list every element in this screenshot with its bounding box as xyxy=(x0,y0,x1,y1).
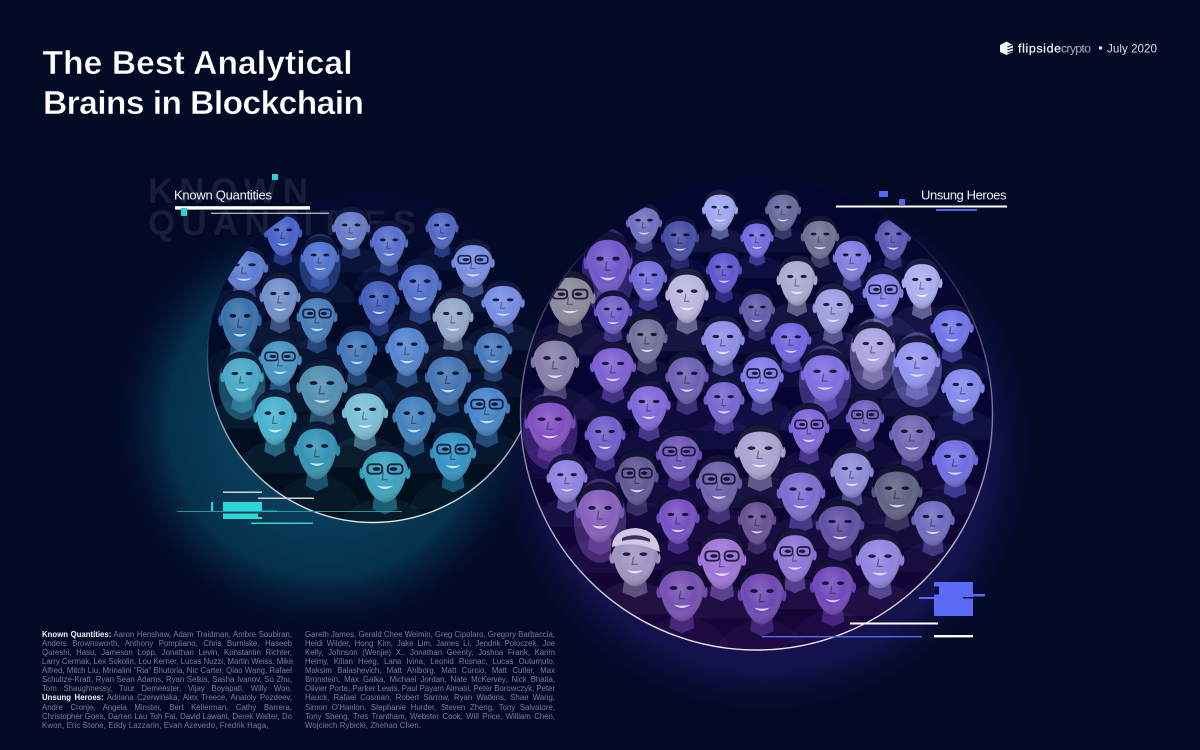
portraits: Known Quantities xyxy=(199,206,543,532)
text block: names column 1: Qureshi, Hasu, Jameson Lopp, Jonathan Levin, Konstantin Richter, xyxy=(42,648,292,657)
circle backdrop and outline xyxy=(520,178,992,650)
logo: flipside crypto with date: crypto xyxy=(1061,41,1091,55)
text block: names column 1: Anders Brownsworth, Anthony Pompliano, Chris Burniske, Haseeb xyxy=(42,639,292,648)
cap on portrait xyxy=(612,528,660,552)
text block: names column 1: Andre Cronje, Angela Minster, Bert Kellerman, Cathy Barrera, xyxy=(42,702,292,712)
text block: names column 1: Kwon, Eric Stone, Eddy Lazzarin, Evan Azevedo, Fredrik Haga, xyxy=(42,721,268,730)
title xyxy=(42,45,364,122)
label: Known Quantities: Known Quantities xyxy=(174,188,272,202)
ghost heading: Known Quantities: KNOWN xyxy=(148,172,308,211)
decoration: teal glitch bars xyxy=(177,492,402,524)
panel: Unsung Heroes circle xyxy=(502,178,1003,654)
text block: names column 1: Unsung Heroes: Adriana Czerwińska, Alex Treece, Anatoly Pozdeev, xyxy=(42,693,292,702)
text block: names column 2: Olivier Porte, Parker Lewis, Paul Payam Almasi, Peter Borowczyk, Peter xyxy=(305,684,555,693)
logo: flipside crypto with date: July 2020 xyxy=(1107,42,1157,55)
text block: names column 2: Heidi Wilder, Hong Kim, Jake Lim, James Li, Jendrik Poloczek, Joe xyxy=(305,639,555,648)
label: Unsung Heroes: Unsung Heroes xyxy=(921,188,1007,202)
title: The Best Analytical xyxy=(42,45,352,82)
text block: names column 2 xyxy=(305,630,555,730)
text block: names column 1: Schultze-Kraft, Ryan Sean Adams, Ryan Selkis, Sasha Ivanov, Su Zhu, xyxy=(42,675,292,684)
text block: names column 1: Tom Shaughnessy, Tuur Demeester, Vijay Boyapati, Willy Woo. xyxy=(42,684,292,693)
text block: names column 1: Alfred, Mitch Liu, Mrinalini "Ria" Bhutoria, Nic Carter, Qiao Wang, Rafael xyxy=(42,666,292,675)
label: Unsung Heroes xyxy=(836,188,1007,211)
label: Known Quantities xyxy=(174,174,329,216)
text block: names column 2: Bronstein, Max Galka, Michael Jordan, Nate McKervey, Nick Bhatia, xyxy=(305,675,555,684)
portraits: Unsung Heroes xyxy=(502,189,1003,654)
text block: names column 2: Wojciech Rybicki, Zhehao Chen. xyxy=(305,721,421,730)
text block: names column 1: Known Quantities: Aaron Henshaw, Adam Traidman, Ambre Soubiran, xyxy=(42,630,292,638)
text block: names column 2: Simon O'Hanlon, Stephanie Hurder, Steven Zheng, Tony Salvatore, xyxy=(305,702,555,712)
background glow: violet behind right circle xyxy=(493,173,1037,717)
logo: flipside crypto with date: flipside xyxy=(1018,41,1061,55)
text block: names column 2: Kelly, Johnson (Wenjie) X., Jonathan Geenty, Joshua Frank, Karim xyxy=(305,648,555,657)
circle backdrop and outline xyxy=(208,192,538,522)
title: Brains in Blockchain xyxy=(43,85,364,122)
panel: Known Quantities circle xyxy=(148,172,543,532)
ghost heading: Known Quantities xyxy=(148,172,416,243)
icon: flipside hexagon xyxy=(1000,42,1013,55)
text block: names column 2: Tony Sheng, Tres Trantham, Webster Cook, Will Price, William Chen, xyxy=(305,712,555,721)
text block: names column 1: Larry Cermak, Lex Sokolin, Lou Kerner, Lucas Nuzzi, Martin Weiss, Mike xyxy=(42,657,293,666)
text block: names column 2: Maksim Balashevich, Matt Ahlborg, Matt Curcio, Matt Cutler, Max xyxy=(305,666,555,675)
logo: flipside crypto with date xyxy=(1000,41,1157,55)
text block: names column 2: Helmy, Kilian Heeg, Lana Ivina, Leonid Rusnac, Lucas Outumuto, xyxy=(305,657,555,666)
text block: names column 2: Gareth James, Gerald Chee Weimin, Greg Cipolaro, Gregory Barbaccia, xyxy=(305,630,555,638)
text block: names column 1: Christopher Goes, Darren Lau Toh Fai, David Lawant, Derek Walter, Do xyxy=(42,712,292,721)
ghost heading: Known Quantities: QUANTITIES xyxy=(148,204,416,243)
text block: names column 2: Hauck, Rafael Cosman, Robert Sarrow, Ryan Watkins, Shae Wang, xyxy=(305,693,555,702)
text block: names column 1 xyxy=(42,630,293,730)
background glow: teal behind left circle xyxy=(113,208,537,632)
decoration: blue glitch bars xyxy=(762,582,985,637)
